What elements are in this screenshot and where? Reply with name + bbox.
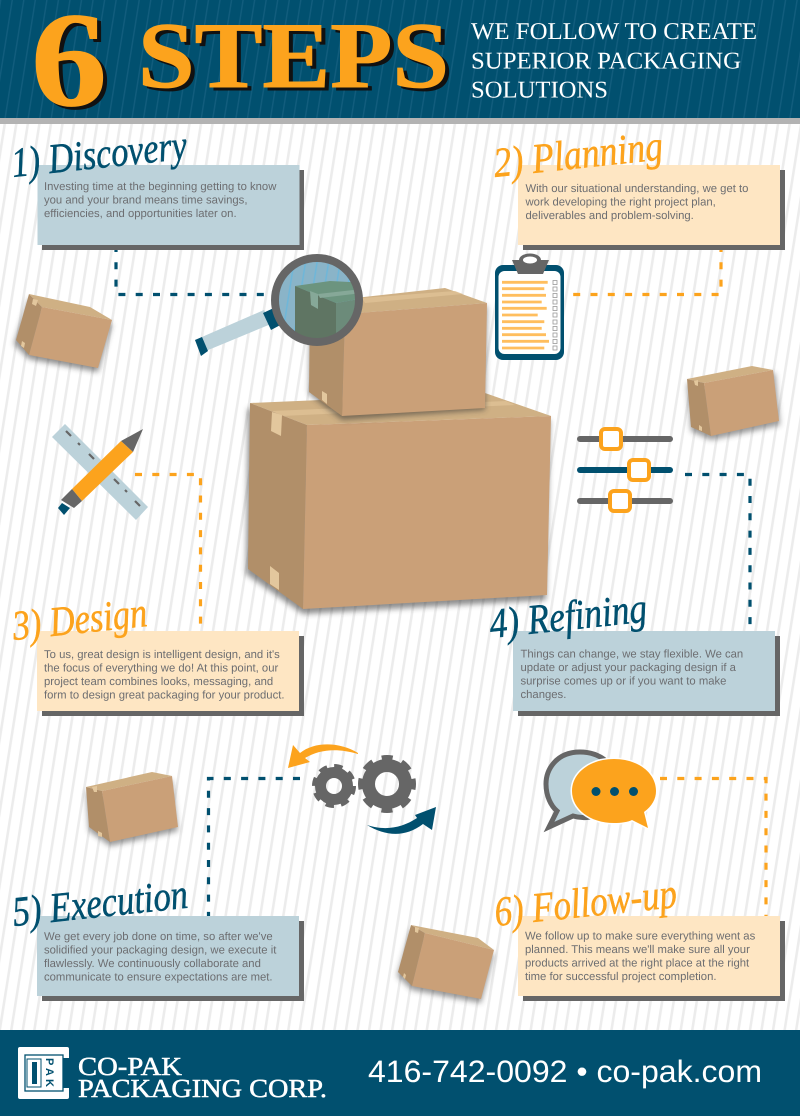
footer banner (0, 1030, 800, 1116)
box: top left (14, 294, 112, 372)
panel: refining text: Things can change, we stay flexible. We can (520, 648, 743, 660)
company name: CO-PAK (78, 1052, 182, 1081)
icon: clipboard (495, 254, 564, 360)
icon: sliders (580, 429, 670, 511)
panel: follow-up text: products arrived at the right place at the right (525, 958, 750, 970)
connector 6 (660, 778, 766, 917)
panel: refining text: changes. (520, 689, 566, 701)
panel: refining text: surprise comes up or if you want to make (520, 676, 726, 688)
heading: 1) Discovery: 1) Discovery (9, 123, 189, 187)
heading: 3) Design: 3) Design (9, 590, 149, 650)
connector 3 (135, 474, 200, 632)
connector 2 (565, 245, 721, 294)
heading: 5) Execution: 5) Execution (10, 872, 190, 936)
panel: execution text: communicate to ensure expectations are met. (44, 972, 273, 984)
title: 6 STEPS (31, 0, 449, 135)
panel: planning text: With our situational understanding, we get to (526, 183, 748, 195)
panel: design text (37, 631, 304, 716)
panel: follow-up text: planned. This means we'll make sure all your (525, 944, 750, 956)
panel: execution text (37, 916, 304, 1001)
panel: planning text: work developing the right project plan, (524, 196, 716, 208)
heading: 4) Refining: 4) Refining (487, 586, 649, 648)
panel: follow-up text (518, 916, 785, 1001)
title: 6 STEPS: STEPS (138, 4, 449, 108)
box: small stacked (309, 288, 487, 420)
box: top right (687, 366, 780, 440)
connector 4 (685, 474, 750, 632)
subtitle: SOLUTIONS (471, 78, 608, 104)
icon: magnifying glass (195, 258, 370, 356)
panel: planning text (518, 165, 785, 250)
panel: design text: the focus of everything we do! At this point, our (44, 662, 278, 674)
contact info: 416-742-0092 • co-pak.com (368, 1054, 762, 1089)
panel: follow-up text: We follow up to make sure everything went as (525, 930, 756, 942)
icon: gears and arrows (288, 744, 436, 834)
icon: speech bubbles (546, 752, 656, 828)
panel: discovery text: efficiencies, and opportunities later on. (44, 208, 237, 220)
box: middle left (86, 772, 178, 846)
heading: 6) Follow-up: 6) Follow-up (492, 871, 679, 936)
subtitle: WE FOLLOW TO CREATE (471, 19, 757, 45)
box: bottom right (397, 925, 494, 1003)
logo mark: P (43, 1058, 55, 1065)
logo mark: A (43, 1068, 55, 1076)
panel: design text: To us, great design is intelligent design, and it's (44, 649, 280, 661)
subtitle (471, 19, 757, 104)
panel: follow-up text: time for successful project completion. (525, 971, 716, 983)
box: large (246, 393, 551, 614)
panel: execution text: We get every job done on time, so after we've (44, 931, 273, 943)
subtitle: SUPERIOR PACKAGING (471, 48, 741, 74)
logo mark: K (43, 1079, 55, 1087)
company name: PACKAGING CORP. (78, 1074, 327, 1103)
header banner (0, 0, 800, 135)
icon: ruler and pencil (52, 424, 148, 520)
company name (78, 1052, 327, 1103)
panel: design text: project team combines looks, messaging, and (44, 676, 273, 688)
panel: refining text: update or adjust your packaging design if a (520, 662, 737, 674)
panel: discovery text: you and your brand means time savings, (44, 194, 247, 206)
panel: refining text (513, 631, 780, 716)
panel: execution text: flawlessly. We continuously collaborate and (44, 958, 261, 970)
connector 5 (208, 778, 300, 917)
panel: design text: form to design great packaging for your product. (44, 690, 285, 702)
panel: planning text: deliverables and problem-solving. (526, 210, 694, 222)
logo mark (18, 1047, 70, 1099)
panel: execution text: solidified your packaging design, we execute it (44, 944, 277, 956)
connector 1 (116, 245, 274, 294)
heading: 2) Planning: 2) Planning (491, 123, 665, 187)
panel: discovery text: Investing time at the beginning getting to know (44, 181, 277, 193)
panel: discovery text (38, 165, 304, 250)
